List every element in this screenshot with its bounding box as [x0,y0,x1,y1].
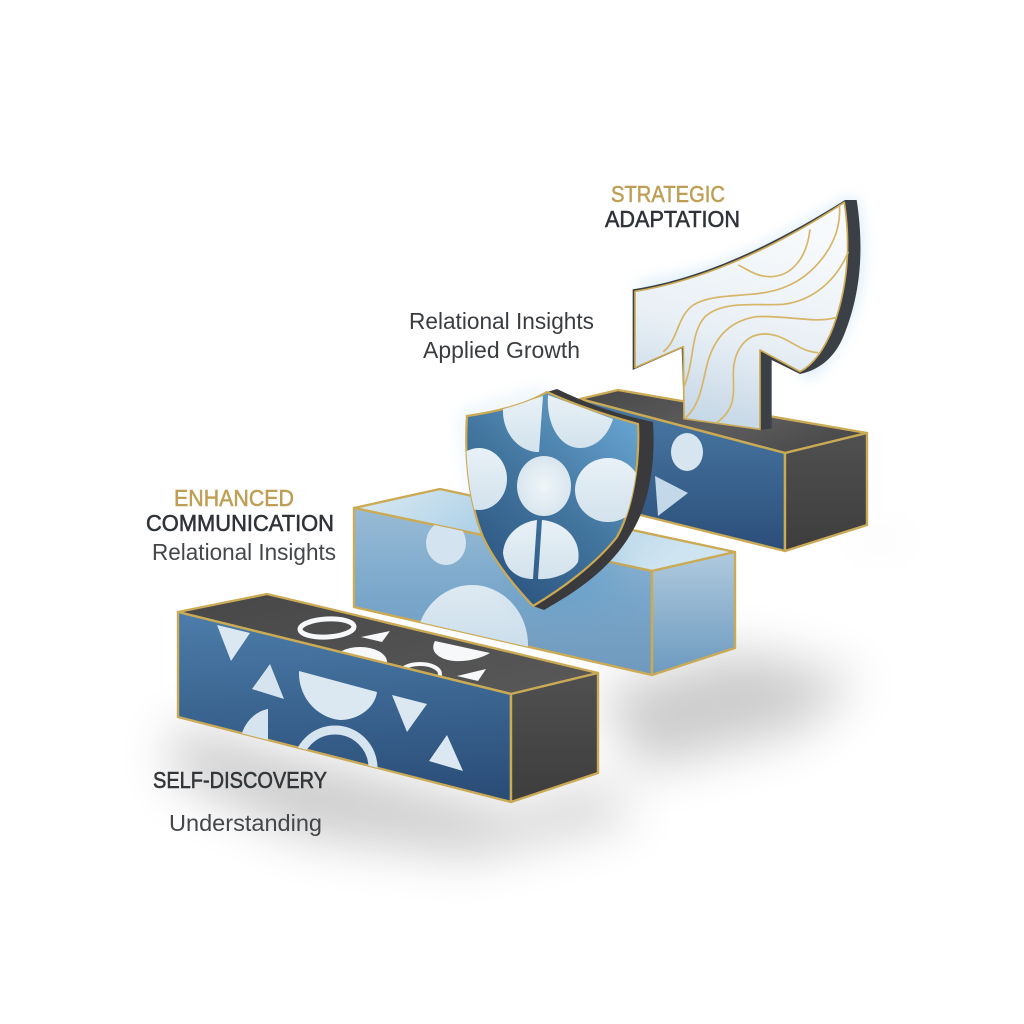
label: self-discovery understanding: Understanding [169,810,322,836]
middle block top face [354,489,735,571]
icon: shield [451,389,654,610]
arrow front face [635,202,848,429]
label: enhanced communication: COMMUNICATION [146,510,334,536]
back block right face [785,433,867,551]
back block front face [580,399,785,551]
background shadows and glows [170,205,910,855]
shield dark edge [466,389,654,610]
middle block right face [652,552,735,675]
label: enhanced communication [146,485,336,565]
icon: upward arrow sculpture [633,200,860,430]
label: self-discovery understanding [153,767,327,836]
shield face [466,392,638,606]
label: enhanced communication: Relational Insights [152,539,336,565]
label: strategic adaptation [605,181,740,232]
label: relational insights applied growth: Applied Growth [423,337,580,363]
front block right face [511,673,598,802]
back block top face [580,390,867,453]
front block front shapes [217,625,463,771]
front block top shapes [300,618,490,684]
label: strategic adaptation: ADAPTATION [605,206,740,232]
label: self-discovery understanding: SELF-DISCOVERY [153,767,327,793]
block: enhanced communication (middle step) [352,488,736,676]
label: relational insights applied growth [409,308,594,363]
front block front face [178,612,511,802]
block: strategic adaptation (back step) [580,390,867,551]
middle block front shapes [420,525,528,647]
shield circles [466,395,636,580]
back block front shapes [655,433,703,516]
arrow contour lines [663,205,848,423]
label: strategic adaptation: STRATEGIC [611,181,725,207]
glow behind shield [510,543,620,607]
label: relational insights applied growth: Relational Insights [409,308,594,334]
middle block front face [354,508,652,675]
arrow dark extrusion [633,200,860,430]
front block top face [178,594,598,694]
label: enhanced communication: ENHANCED [174,485,294,511]
block: self-discovery (front step) [178,594,598,806]
